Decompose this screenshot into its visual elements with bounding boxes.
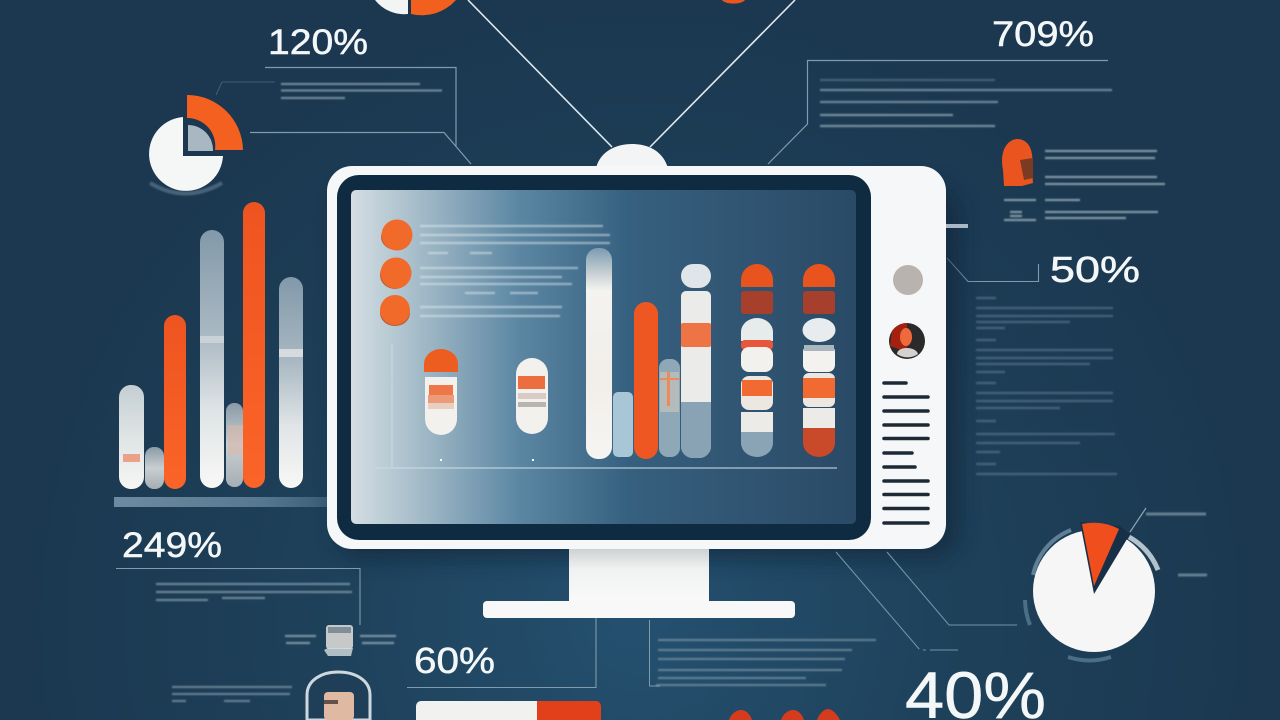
callout: top left [216, 68, 471, 164]
top pie fragment [375, 0, 456, 15]
stacked pill H [741, 264, 773, 457]
percentage: 249%: 249% [122, 526, 222, 565]
top orange fragment [722, 0, 745, 4]
monitor shadow [335, 185, 960, 560]
callout: bottom left [116, 568, 360, 625]
pill B [516, 358, 548, 434]
monitor side connector [946, 224, 968, 228]
text block: left of face [172, 687, 292, 701]
percentage: 60%: 60% [414, 640, 495, 681]
callout: 60% [407, 618, 596, 688]
progress bar [416, 701, 601, 720]
screen chart axes [375, 344, 837, 468]
stacked pill G [681, 264, 711, 458]
percentage: 709%: 709% [992, 15, 1094, 54]
screen [351, 190, 856, 524]
text block: right of icon [1004, 151, 1165, 220]
panel vent lines [884, 383, 928, 523]
screen bar E [634, 302, 658, 459]
connector: 50% [947, 258, 1038, 282]
icon: face portrait [307, 672, 370, 720]
text block: faint right column [976, 298, 1117, 474]
monitor stand [483, 546, 795, 618]
icon: device [285, 625, 396, 656]
screen bar D [613, 392, 633, 457]
percentage: 120%: 120% [268, 23, 368, 62]
callout: bottom centre [650, 620, 876, 686]
connector lines from monitor knob [468, 0, 795, 147]
pie chart: large [1025, 508, 1207, 660]
callout: top right [768, 60, 1112, 164]
monitor frame [327, 166, 946, 549]
panel button [893, 265, 923, 295]
pie chart: top left [149, 95, 243, 194]
panel avatar icon [889, 323, 925, 359]
stacked pill I [802, 264, 836, 457]
pill A [424, 349, 458, 435]
percentage: 50%: 50% [1050, 249, 1140, 290]
red markers at bottom [729, 709, 840, 720]
monitor base [483, 601, 795, 618]
screen bullets [380, 220, 412, 326]
monitor [327, 166, 946, 549]
icon: orange figure [1002, 139, 1033, 186]
bar chart: left [114, 202, 327, 507]
chart baseline [114, 497, 327, 507]
screen text lines [420, 226, 610, 316]
screen bar F [659, 359, 680, 457]
bezel [337, 175, 871, 540]
monitor knob [596, 144, 668, 168]
lines to large pie [836, 552, 1017, 650]
screen bar C [586, 248, 612, 459]
